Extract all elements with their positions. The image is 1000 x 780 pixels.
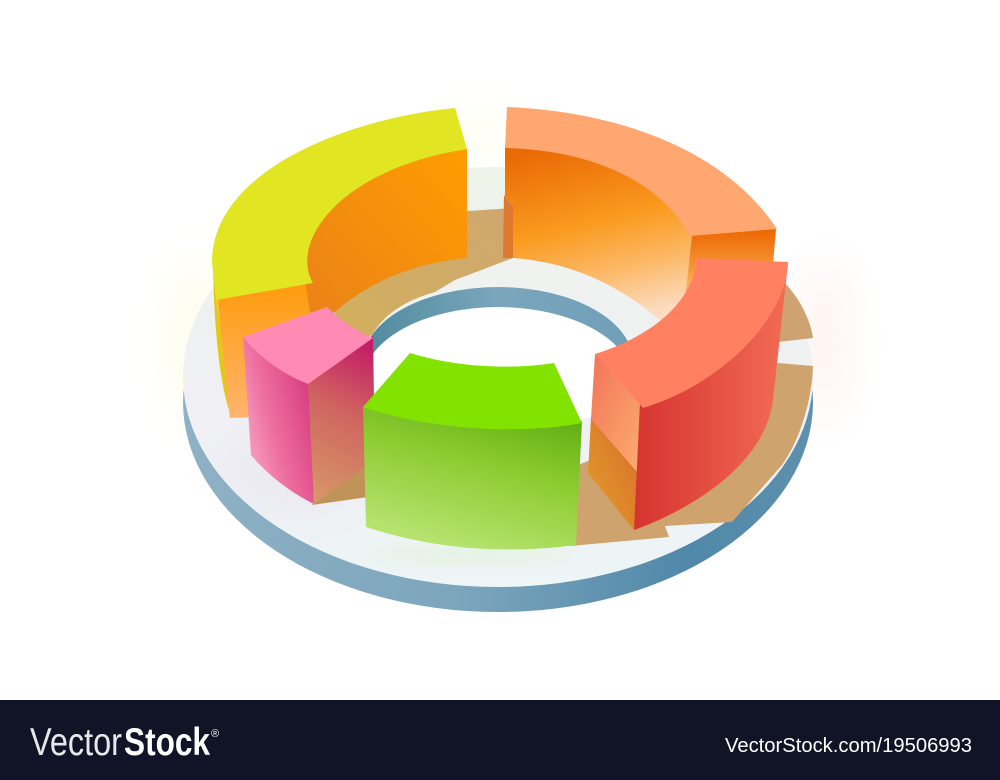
segment: pink xyxy=(243,307,375,504)
logo bold part: Stock xyxy=(124,721,210,764)
segment: orange xyxy=(503,107,777,322)
VectorStock logo: Vector xyxy=(30,721,122,764)
green top face xyxy=(363,353,582,429)
red outer wall xyxy=(634,263,788,530)
cast shadow: front left xyxy=(312,450,368,505)
segment: yellow xyxy=(212,108,467,418)
red end face upper xyxy=(591,354,645,473)
platform ring xyxy=(183,167,813,612)
cast shadow: right upper xyxy=(778,278,813,342)
platform shading xyxy=(221,472,556,566)
orange inner wall xyxy=(505,145,692,322)
center hole xyxy=(373,307,617,421)
red end face lower xyxy=(588,418,639,530)
orange end face xyxy=(685,229,776,300)
registered mark: ® xyxy=(211,728,219,740)
yellow end face xyxy=(217,278,316,418)
yellow top face xyxy=(212,108,467,300)
segment: green xyxy=(363,353,582,549)
orange top face xyxy=(505,107,777,236)
cast shadow: right lower xyxy=(570,363,813,546)
center hole inner wall xyxy=(363,287,633,437)
green front face xyxy=(363,405,582,549)
pink left face xyxy=(243,335,314,504)
cast shadow: back left xyxy=(335,208,513,350)
segment: red xyxy=(588,258,788,530)
platform side xyxy=(183,192,813,612)
platform top surface xyxy=(183,167,813,587)
orange small edge xyxy=(503,195,513,258)
red top face xyxy=(595,258,788,408)
yellow inner wall xyxy=(300,149,467,330)
image id: VectorStock.com/19506993 xyxy=(725,735,972,757)
soft glow xyxy=(167,110,847,425)
footer bar xyxy=(0,700,1000,780)
yellow outer wall xyxy=(213,262,232,418)
pink right face xyxy=(308,336,375,504)
pink top face xyxy=(243,307,373,384)
